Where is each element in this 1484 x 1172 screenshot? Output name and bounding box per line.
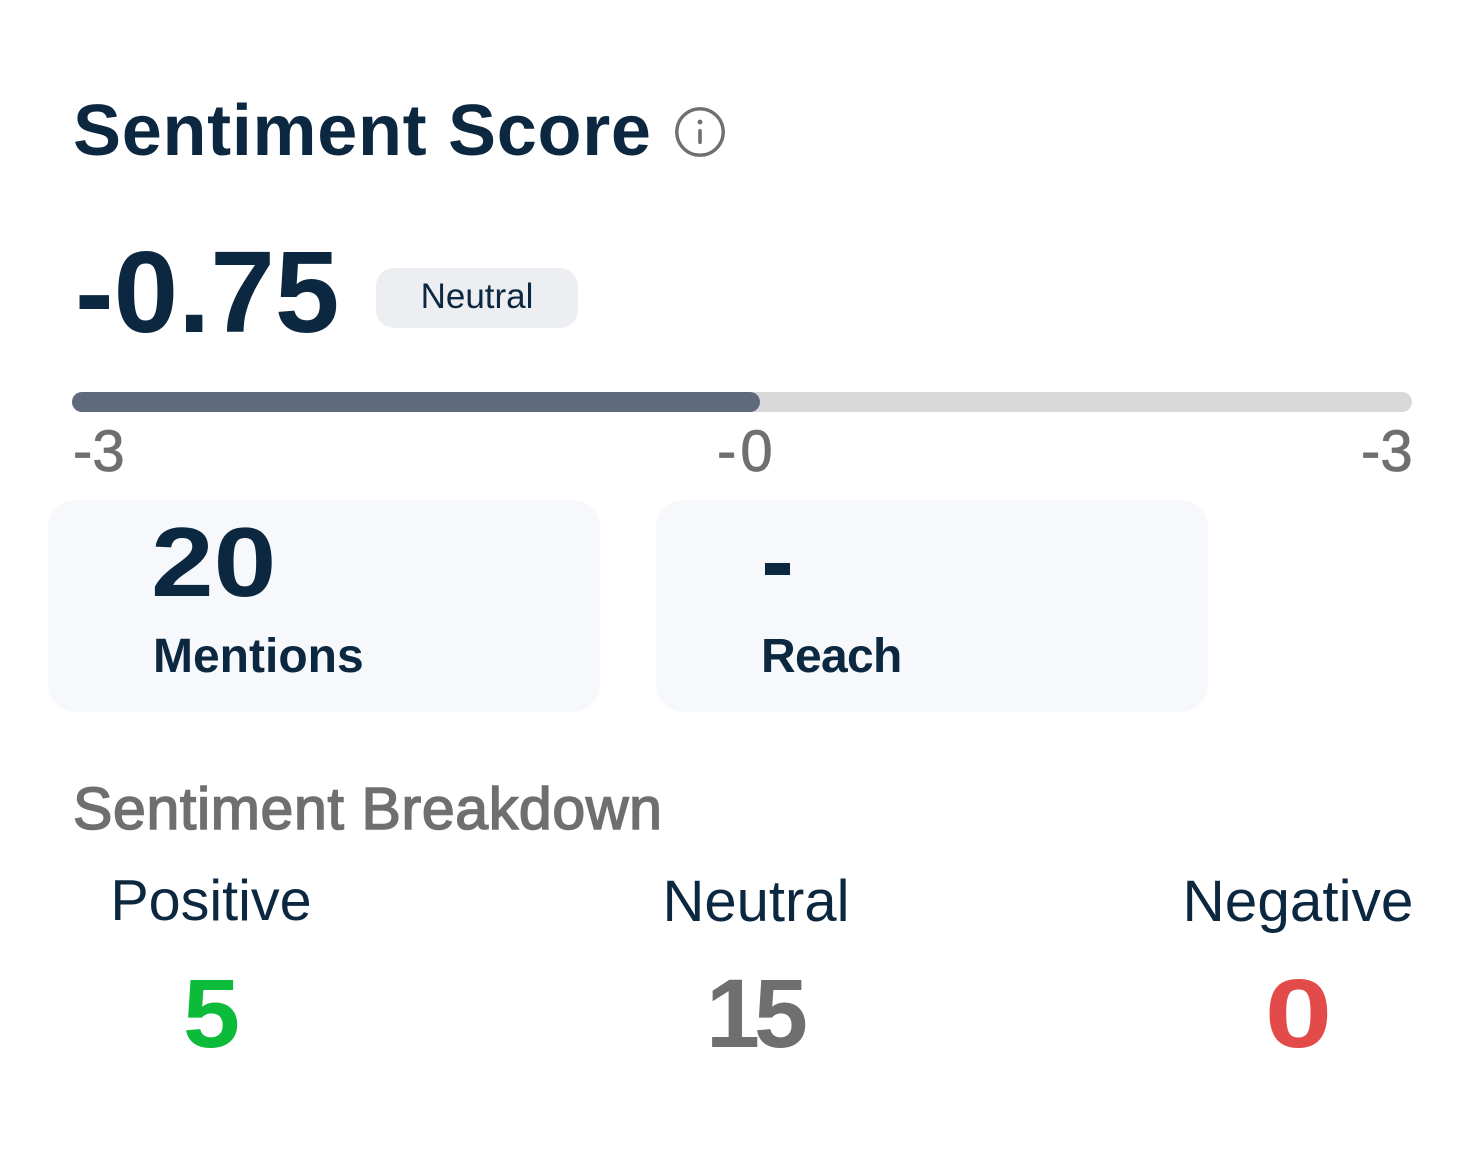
panel: reach — [656, 500, 1208, 712]
scale label right: -3 — [1361, 419, 1413, 484]
positive label: Positive — [110, 869, 312, 933]
positive value: 5 — [183, 959, 240, 1068]
title: Sentiment Score — [73, 91, 652, 171]
breakdown heading: Sentiment Breakdown — [73, 776, 663, 842]
progress bar fill — [72, 392, 760, 412]
negative label: Negative — [1183, 869, 1413, 934]
reach label: Reach — [761, 630, 902, 683]
icon: info — [675, 107, 725, 157]
progress bar — [72, 392, 1412, 412]
neutral badge: Neutral — [421, 277, 533, 316]
neutral column — [662, 869, 849, 1068]
scale label left: -3 — [73, 419, 125, 484]
scale label middle: -0 — [717, 419, 777, 484]
score value: -0.75 — [75, 227, 339, 357]
positive column — [110, 869, 312, 1068]
negative column — [1183, 869, 1413, 1068]
neutral badge — [376, 268, 578, 328]
neutral value: 15 — [706, 959, 802, 1068]
mentions label: Mentions — [153, 630, 364, 683]
negative value: 0 — [1265, 959, 1332, 1068]
mentions value: 20 — [151, 507, 276, 617]
panel: mentions — [48, 500, 600, 712]
neutral label: Neutral — [662, 869, 849, 934]
reach dash — [765, 563, 790, 575]
